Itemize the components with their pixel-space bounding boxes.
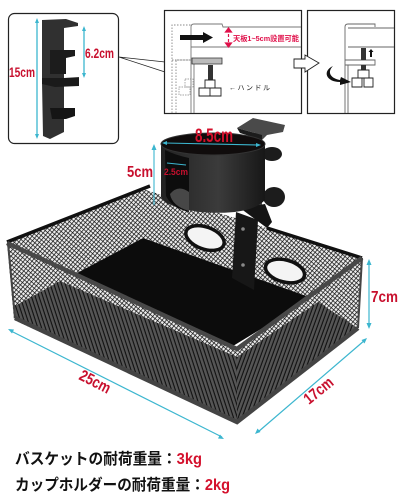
panel: tighten handle diagram bbox=[308, 10, 394, 114]
arrow: panel transition bbox=[294, 55, 319, 72]
rim lines bbox=[7, 186, 362, 258]
clamp behind cup bbox=[237, 118, 285, 228]
right wall light mesh bbox=[237, 258, 362, 423]
label: thickness range: 天板1~5cm設置可能 bbox=[233, 34, 300, 43]
front wall light mesh bbox=[7, 243, 237, 423]
basket bbox=[7, 186, 362, 423]
oval hole left bbox=[182, 221, 228, 255]
handle knob bbox=[352, 70, 373, 87]
arrow: 6.2cm height bbox=[82, 26, 86, 78]
floor bbox=[77, 238, 312, 346]
bracket bbox=[232, 212, 258, 290]
front wall dark mesh bbox=[15, 281, 237, 421]
table top lines bbox=[191, 24, 301, 113]
arrow: 7cm basket height bbox=[366, 259, 372, 329]
panel: clamp height dimensions bbox=[8, 14, 118, 144]
text: cup holder load capacity: カップホルダーの耐荷重量：2kg bbox=[15, 475, 230, 494]
dashed handle bbox=[179, 79, 193, 95]
arrow: 8.5cm cup diameter bbox=[162, 141, 261, 147]
text: basket load capacity: バスケットの耐荷重量：3kg bbox=[15, 450, 202, 468]
label: 25cm: 25cm bbox=[76, 367, 113, 398]
arrow: 2.5cm slot width bbox=[167, 163, 186, 165]
label: 5cm: 5cm bbox=[127, 164, 153, 181]
label: 17cm: 17cm bbox=[301, 374, 337, 408]
label: handle: ←ハンドル bbox=[229, 85, 270, 92]
arrow: up bbox=[368, 49, 374, 57]
dashed clamp outline bbox=[172, 25, 191, 113]
arrow: insert direction bbox=[180, 32, 213, 43]
back mesh wall bbox=[143, 189, 362, 298]
panel: desktop thickness diagram bbox=[164, 10, 302, 114]
arrow: 17cm basket width bbox=[255, 338, 367, 434]
label: 15cm: 15cm bbox=[9, 64, 35, 80]
right wall dark mesh bbox=[237, 302, 356, 420]
arrow: 25cm basket length bbox=[8, 329, 224, 439]
label: 6.2cm: 6.2cm bbox=[85, 45, 114, 61]
cup holder bbox=[161, 133, 265, 213]
label: 2.5cm: 2.5cm bbox=[164, 167, 188, 177]
left mesh wall bbox=[7, 189, 143, 273]
icon: clamp bracket bbox=[42, 19, 79, 139]
arrow: rotate handle bbox=[327, 66, 351, 85]
label: 8.5cm: 8.5cm bbox=[195, 126, 233, 147]
screw bbox=[361, 48, 366, 60]
handle knob bbox=[199, 80, 221, 96]
clamp arm and screw bbox=[192, 58, 222, 64]
callout: leader lines bbox=[119, 57, 165, 72]
oval hole right bbox=[263, 255, 307, 287]
arrow: thickness range bbox=[226, 28, 232, 47]
arrow: 5cm cup height bbox=[152, 144, 156, 205]
table top and clamp lines bbox=[345, 24, 394, 113]
arrow: 15cm height bbox=[35, 18, 39, 139]
